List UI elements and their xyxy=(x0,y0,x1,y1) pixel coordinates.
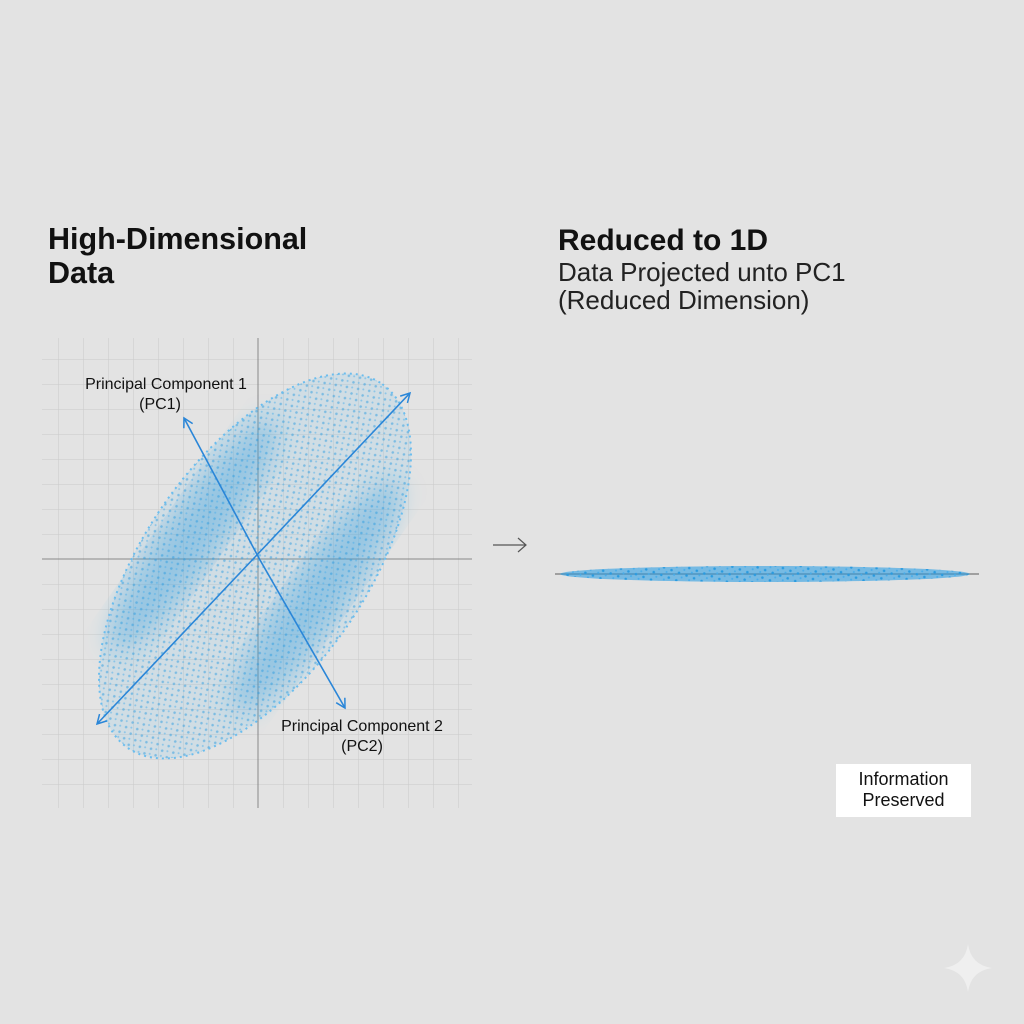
subtitle: Data Projected unto PC1 xyxy=(558,257,846,287)
chart: 1D projection xyxy=(555,566,979,582)
heading: Reduced to 1D xyxy=(558,224,768,257)
label: PC1: (PC1) xyxy=(139,396,181,413)
title: high-dimensional data: High-Dimensional xyxy=(48,222,307,256)
title: reduced to 1D xyxy=(558,224,846,315)
arrow: PC2 xyxy=(184,418,260,560)
label: PC1: Principal Component 1 xyxy=(85,376,247,393)
scatter cloud xyxy=(38,321,472,811)
callout: information preserved: Information xyxy=(858,769,949,789)
label: PC1 xyxy=(85,376,247,413)
callout: information preserved xyxy=(836,764,971,817)
grid xyxy=(42,338,472,808)
title: high-dimensional data xyxy=(48,222,307,290)
label: PC2: (PC2) xyxy=(341,738,383,755)
arrow: PC1 xyxy=(255,393,410,557)
callout: information preserved: Preserved xyxy=(862,790,945,810)
label: PC2 xyxy=(281,718,443,755)
arrow: transition xyxy=(493,538,526,552)
subtitle: (Reduced Dimension) xyxy=(558,285,809,315)
subtitle xyxy=(558,257,846,315)
icon: sparkle xyxy=(944,944,992,992)
label: PC2: Principal Component 2 xyxy=(281,718,443,735)
title: high-dimensional data: Data xyxy=(48,256,114,290)
